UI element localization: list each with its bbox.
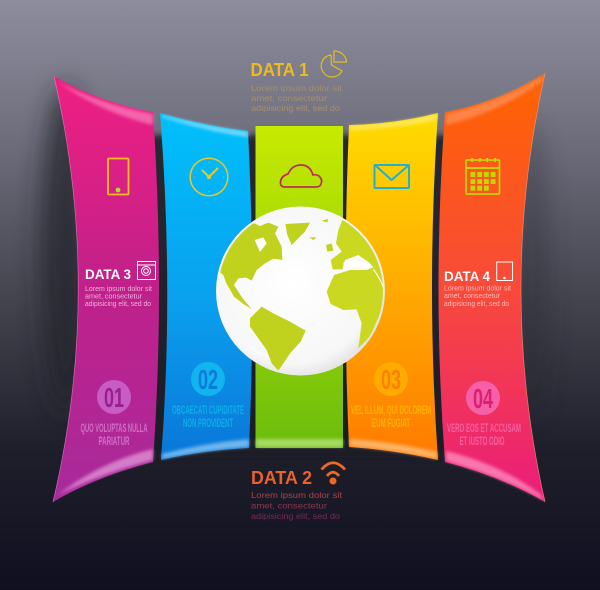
caption 02: NON PROVIDENT bbox=[183, 418, 233, 430]
DATA 4 text: Lorem ipsum dolor sit bbox=[444, 286, 511, 292]
gloss bbox=[256, 439, 343, 447]
gloss bbox=[58, 82, 153, 125]
DATA 1 block bbox=[250, 51, 346, 113]
DATA 3 block bbox=[85, 262, 156, 308]
iceland bbox=[309, 237, 317, 240]
gloss bbox=[162, 115, 248, 137]
arctic island bbox=[322, 219, 328, 223]
caption 03: EUM FUGIAT bbox=[372, 418, 410, 430]
africa bbox=[327, 267, 388, 348]
icon: pie chart bbox=[321, 51, 346, 77]
panel: magenta band bbox=[53, 76, 159, 502]
mediterranean bbox=[343, 262, 344, 265]
DATA 2 block: DATA 2 bbox=[251, 467, 312, 488]
icon: camera bbox=[138, 262, 156, 280]
panel: orange band bbox=[346, 113, 438, 460]
number 04: 04 bbox=[473, 383, 493, 414]
number 03: 03 bbox=[381, 364, 401, 395]
band shadows bbox=[40, 85, 550, 455]
icon: phone bbox=[108, 158, 128, 194]
icon: envelope bbox=[374, 165, 409, 188]
south america bbox=[250, 307, 306, 371]
caption 02: OBCAECATI CUPIDITATE bbox=[172, 405, 244, 417]
DATA 1 block: DATA 1 bbox=[250, 59, 308, 80]
number 03 bbox=[374, 362, 408, 396]
DATA 1 text: Lorem ipsum dolor sit bbox=[251, 83, 343, 93]
DATA 2 block bbox=[251, 463, 345, 521]
globe bbox=[216, 206, 390, 376]
icon: clock bbox=[190, 158, 228, 196]
caption 04: VERO EOS ET ACCUSAM bbox=[447, 423, 521, 435]
panel: red band bbox=[438, 73, 545, 502]
gloss bbox=[350, 114, 437, 130]
DATA 3 block: DATA 3 bbox=[85, 267, 131, 282]
DATA 4 text: adipisicing elit, sed do bbox=[444, 301, 509, 308]
north america bbox=[217, 222, 282, 309]
DATA 2 text: adipisicing elit, sed do bbox=[251, 511, 340, 521]
caption 04: ET IUSTO ODIO bbox=[460, 436, 505, 448]
panel: blue band bbox=[160, 113, 252, 460]
number 01: 01 bbox=[104, 382, 124, 413]
number 02: 02 bbox=[198, 364, 218, 395]
DATA 3 text: amet, consectetur bbox=[85, 294, 143, 300]
panel: green band bbox=[256, 126, 343, 448]
caption 01: PARIATUR bbox=[98, 436, 130, 448]
number 01 bbox=[97, 380, 131, 414]
greenland bbox=[285, 223, 310, 245]
number 02 bbox=[191, 362, 225, 396]
DATA 1 text: adipisicing elit, sed do bbox=[251, 103, 340, 113]
number 04 bbox=[466, 381, 500, 415]
globe highlights bbox=[250, 269, 383, 355]
gloss bbox=[446, 75, 544, 125]
DATA 4 block: DATA 4 bbox=[444, 269, 490, 284]
DATA 2 text: amet, consectetur bbox=[251, 500, 327, 510]
europe and asia bbox=[330, 220, 382, 280]
DATA 2 text: Lorem ipsum dolor sit bbox=[251, 490, 343, 500]
icon: calendar bbox=[466, 158, 500, 194]
icon: cloud bbox=[280, 165, 322, 187]
icon: tablet bbox=[497, 262, 512, 280]
DATA 1 text: amet, consectetur bbox=[251, 93, 327, 103]
icon: wifi bbox=[322, 463, 345, 484]
DATA 4 block bbox=[444, 262, 512, 308]
hudson bay bbox=[255, 237, 267, 252]
DATA 3 text: adipisicing elit, sed do bbox=[85, 301, 151, 308]
britain bbox=[326, 243, 333, 252]
DATA 3 text: Lorem ipsum dolor sit bbox=[85, 286, 152, 293]
caption 01: QUO VOLUPTAS NULLA bbox=[80, 423, 148, 435]
DATA 4 text: amet, consectetur bbox=[444, 293, 501, 300]
caption 03: VEL ILLUM, QUI DOLOREM bbox=[351, 405, 431, 417]
